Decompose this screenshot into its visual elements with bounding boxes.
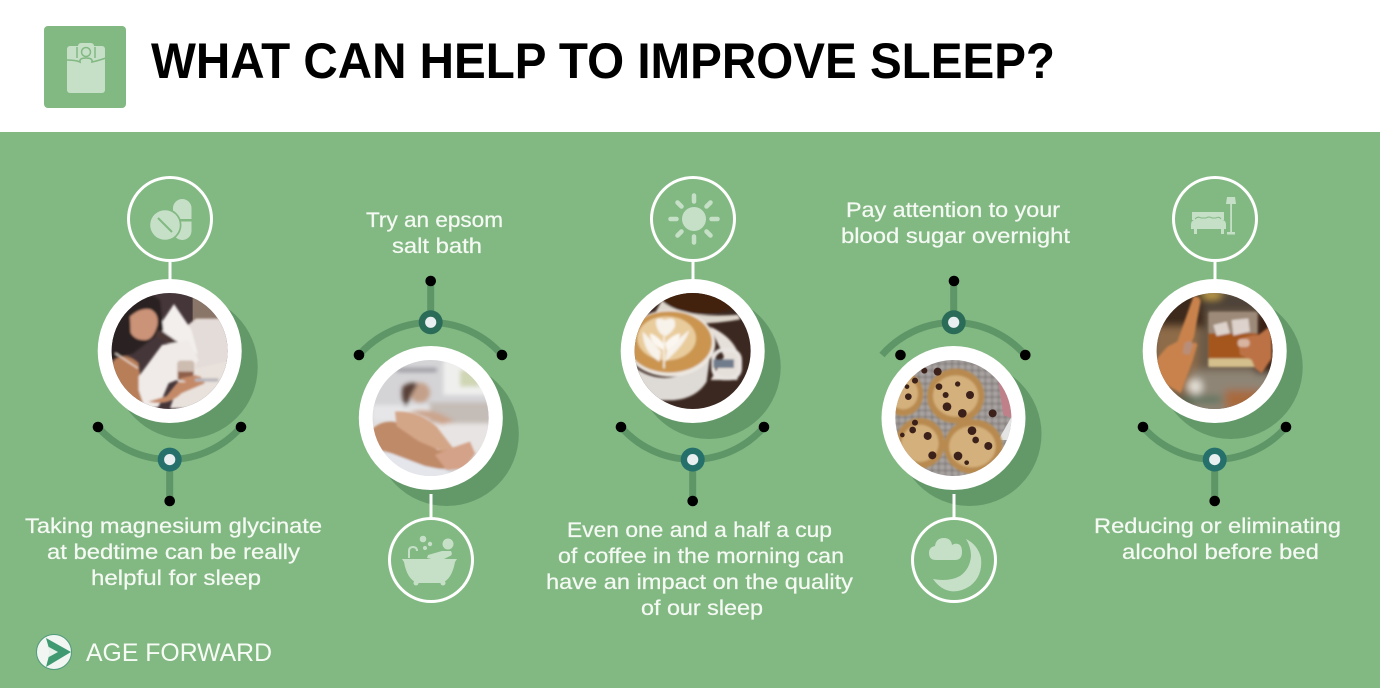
header icon: bed [44,26,126,108]
text: blood sugar: Pay attention to your [846,199,1060,222]
title: WHAT CAN HELP TO IMPROVE SLEEP? [151,33,1055,89]
icon: bed and lamp [1174,178,1256,260]
connector arc with nodes [882,276,1031,360]
step 1: magnesium [25,178,322,590]
icon: sun [652,178,734,260]
photo: latte [621,279,781,439]
text: epsom salt bath: salt bath [392,235,482,258]
connector: photo to icon [952,494,956,518]
text: coffee: of our sleep [641,597,763,620]
step 4: blood sugar [841,199,1070,602]
connector: icon to photo [1214,260,1216,282]
text: blood sugar: blood sugar overnight [841,225,1070,248]
photo: woman in bath [359,346,519,506]
icon: pills [128,178,212,260]
text: coffee: have an impact on the quality [546,571,854,594]
text: magnesium [25,515,322,590]
photo: cookies [882,346,1042,506]
text: magnesium: helpful for sleep [91,567,261,590]
connector arc with nodes [93,422,246,506]
text: alcohol: alcohol before bed [1122,541,1319,564]
step 3: coffee [546,178,854,620]
connector: photo to icon [430,494,432,518]
connector arc with nodes [616,422,769,506]
logo: Age Forward [36,634,272,670]
connector: icon to photo [692,260,694,282]
text: coffee: of coffee in the morning can [558,545,844,568]
photo: hand refusing whisky [1143,279,1303,439]
text: magnesium: at bedtime can be really [47,541,301,564]
icon: cloud and moon [912,518,996,602]
text: coffee [546,519,854,620]
connector arc with nodes [354,276,507,360]
photo: woman in bed with pills [98,279,258,439]
text: blood sugar [841,199,1070,248]
icon: logo arrow [36,634,72,670]
text: magnesium: Taking magnesium glycinate [25,515,322,538]
step 5: alcohol [1094,178,1341,564]
text: epsom salt bath: Try an epsom [366,209,503,232]
text: coffee: Even one and a half a cup [567,519,832,542]
text: epsom salt bath [366,209,503,258]
connector: icon to photo [168,260,172,282]
text: alcohol: Reducing or eliminating [1094,515,1341,538]
text: alcohol [1094,515,1341,564]
step 2: epsom salt bath [354,209,519,602]
brand name: AGE FORWARD [86,639,272,667]
connector arc with nodes [1138,422,1291,506]
icon: bathtub [390,518,472,602]
